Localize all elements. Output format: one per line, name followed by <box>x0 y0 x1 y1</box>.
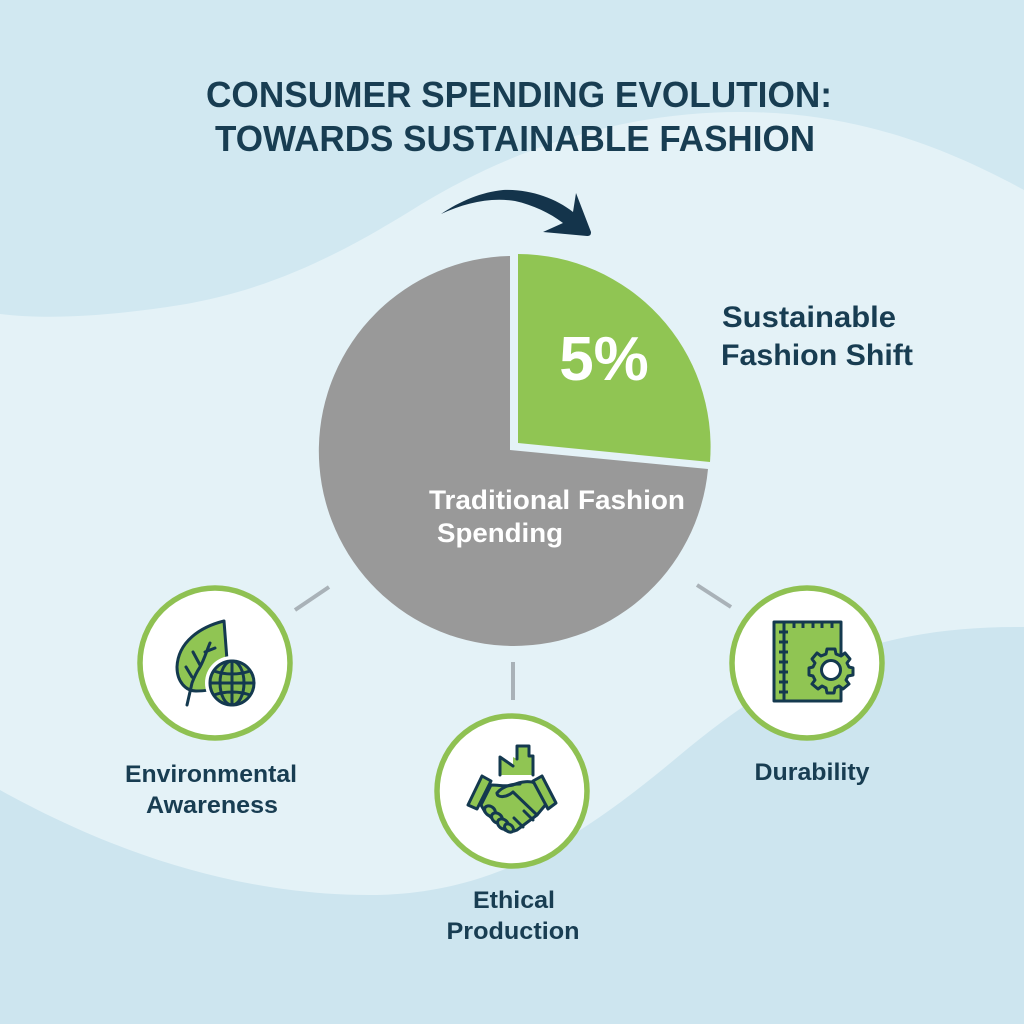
icon: leaf and globe <box>177 621 259 710</box>
label: Durability <box>754 759 870 786</box>
factor: ethical production <box>437 716 587 945</box>
title <box>206 74 832 159</box>
label: sustainable fashion shift <box>721 301 913 372</box>
icon badge <box>437 716 587 866</box>
factor: durability <box>732 588 882 786</box>
icon badge <box>732 588 882 738</box>
icon: factory and handshake <box>468 746 556 834</box>
title: CONSUMER SPENDING EVOLUTION: <box>206 74 832 115</box>
slice label: traditional <box>429 485 685 548</box>
slice value: 5% <box>559 325 649 394</box>
slice label: traditional: Traditional Fashion <box>429 485 685 515</box>
label: Ethical <box>473 887 555 914</box>
factor: environmental awareness <box>125 588 297 819</box>
icon badge <box>140 588 290 738</box>
label <box>125 761 297 819</box>
label: sustainable fashion shift: Fashion Shift <box>721 339 913 372</box>
slice label: traditional: Spending <box>437 518 563 548</box>
label: Environmental <box>125 761 297 788</box>
pie slice: traditional fashion spending <box>319 256 708 646</box>
connector lines <box>295 585 731 700</box>
arrow: shift towards sustainable <box>441 190 591 236</box>
icon: pattern book and gear <box>774 622 853 701</box>
label: Awareness <box>146 792 278 819</box>
label: Production <box>446 918 580 945</box>
pie chart <box>319 254 711 646</box>
label: sustainable fashion shift: Sustainable <box>722 301 896 334</box>
title: TOWARDS SUSTAINABLE FASHION <box>215 118 815 159</box>
pie slice: sustainable fashion shift <box>518 254 711 462</box>
label <box>446 887 580 945</box>
